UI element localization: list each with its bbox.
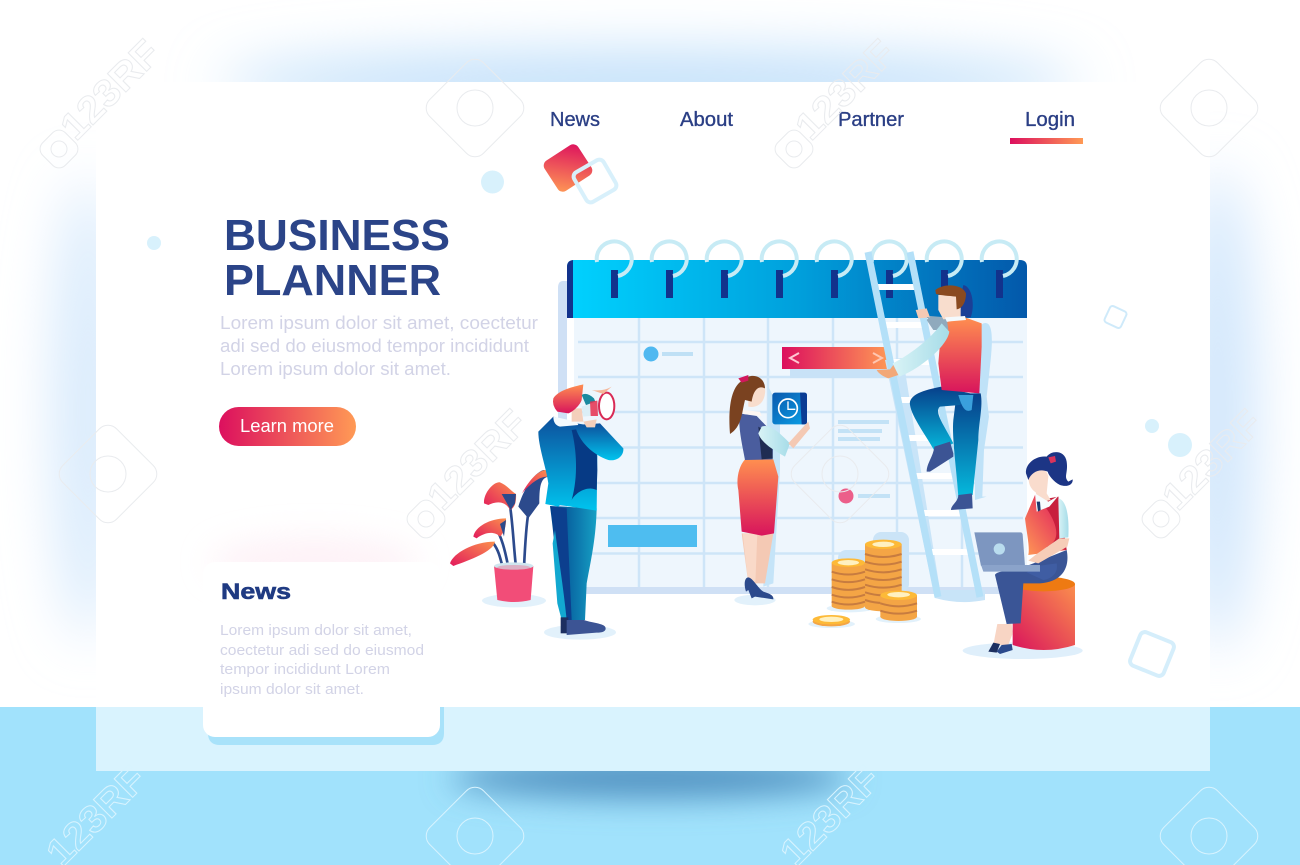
watermark 7 <box>786 420 894 528</box>
single coin <box>813 615 850 626</box>
background glow <box>54 52 1256 650</box>
hair <box>553 384 583 413</box>
clock face <box>779 399 797 418</box>
news card <box>203 562 444 745</box>
login underline <box>1010 138 1083 144</box>
watermark 1: 123RF <box>53 32 169 148</box>
back leg <box>953 393 981 497</box>
news body: ipsum dolor sit amet. <box>220 681 364 698</box>
trousers <box>550 506 597 620</box>
legs <box>742 533 773 583</box>
vest <box>739 413 773 460</box>
watermark 12 <box>1155 782 1263 865</box>
intro paragraph: adi sed do eiusmod tempor incididunt <box>220 336 529 356</box>
laptop <box>974 532 1025 566</box>
figure shadow <box>973 323 992 500</box>
stack: short <box>880 591 917 621</box>
seated woman with laptop <box>963 452 1083 659</box>
news body: tempor incididunt Lorem <box>220 661 390 678</box>
news body <box>220 622 424 698</box>
leaves <box>450 542 495 566</box>
face and neck <box>1028 468 1051 503</box>
nav item: About: About <box>680 109 733 131</box>
watermark 10 <box>421 782 529 865</box>
month selector bar <box>782 347 890 378</box>
ladder shadow <box>885 358 985 602</box>
calendar shadow <box>558 281 1027 594</box>
calendar <box>558 241 1027 594</box>
collar and tie <box>1035 493 1058 512</box>
shoes <box>745 577 773 599</box>
clock tile with arm <box>758 393 810 457</box>
shoes <box>927 442 953 472</box>
landing panel <box>96 82 1210 771</box>
calendar body <box>567 318 1027 587</box>
watermark 1 <box>36 32 169 172</box>
nav item: News: News <box>550 109 600 131</box>
decorative outline tile <box>572 158 618 204</box>
watermark 5 <box>54 420 162 528</box>
face and neck <box>938 295 961 319</box>
jacket <box>538 417 597 511</box>
legs <box>995 550 1067 624</box>
collar <box>742 410 762 416</box>
woman with clock <box>729 375 780 605</box>
watermark 6 <box>403 402 536 542</box>
news card glow <box>210 538 420 586</box>
coins <box>808 540 921 628</box>
man on ladder <box>877 285 992 510</box>
watermark 3 <box>771 32 904 172</box>
watermark 6: 123RF <box>420 402 536 518</box>
floor band <box>0 707 1300 865</box>
pot <box>494 566 533 602</box>
calendar event: red dot <box>838 488 890 504</box>
hair <box>729 376 765 434</box>
ladder rungs <box>876 287 970 552</box>
calendar grid <box>578 318 1023 587</box>
man with megaphone <box>538 384 623 640</box>
news heading: News <box>221 579 291 604</box>
near arm <box>893 323 949 377</box>
calendar blue block <box>608 525 697 547</box>
coins shadows on wall <box>838 532 909 592</box>
title: PLANNER <box>224 256 441 305</box>
watermark 4 <box>1155 54 1263 162</box>
nav item: Login: Login <box>1025 109 1075 131</box>
watermark 8: 123RF <box>1155 402 1271 518</box>
ladder rails <box>868 252 938 597</box>
calendar rings <box>597 241 1017 298</box>
watermark 2 <box>421 54 529 162</box>
intro paragraph: Lorem ipsum dolor sit amet. <box>220 359 451 379</box>
stack: medium <box>832 558 865 610</box>
tile <box>772 393 807 424</box>
torso <box>1025 495 1067 555</box>
vest <box>938 317 982 393</box>
sleeve <box>1058 498 1069 538</box>
intro paragraph: Lorem ipsum dolor sit amet, coectetur <box>220 313 538 333</box>
learn more button <box>219 407 356 446</box>
skirt <box>737 459 778 536</box>
intro paragraph <box>220 313 538 379</box>
calendar header <box>567 260 1027 318</box>
news body: Lorem ipsum dolor sit amet, <box>220 622 412 639</box>
title: BUSINESS <box>224 211 450 260</box>
jacket arm <box>575 423 623 460</box>
watermark 3: 123RF <box>788 32 904 148</box>
decorative pink tile <box>541 142 618 204</box>
face <box>748 379 765 407</box>
hair <box>1026 452 1073 486</box>
far arm <box>927 316 948 330</box>
ladder <box>868 252 985 602</box>
nav item: Partner: Partner <box>838 109 904 131</box>
title <box>224 211 450 305</box>
stems <box>493 502 528 567</box>
news body: coectetur adi sed do eiusmod <box>220 642 424 659</box>
navigation <box>550 109 1083 144</box>
learn more button: Learn more <box>240 416 334 436</box>
plant <box>450 470 548 607</box>
hair <box>935 285 966 309</box>
forearm <box>1028 538 1069 563</box>
decorative dots and tiles <box>147 170 1192 677</box>
coin shadows <box>808 604 921 628</box>
arm <box>758 426 790 457</box>
stack: tall <box>865 540 902 611</box>
feet <box>993 624 1013 645</box>
cylinder stool <box>1013 584 1075 650</box>
megaphone <box>582 394 597 407</box>
calendar note lines <box>838 420 889 441</box>
calendar event: blue dot <box>644 346 693 362</box>
watermark 8 <box>1138 402 1271 542</box>
front leg <box>910 387 970 452</box>
panel shadow <box>450 758 850 798</box>
shoes <box>561 617 568 633</box>
collar <box>553 417 578 427</box>
wall shadow <box>763 387 780 587</box>
